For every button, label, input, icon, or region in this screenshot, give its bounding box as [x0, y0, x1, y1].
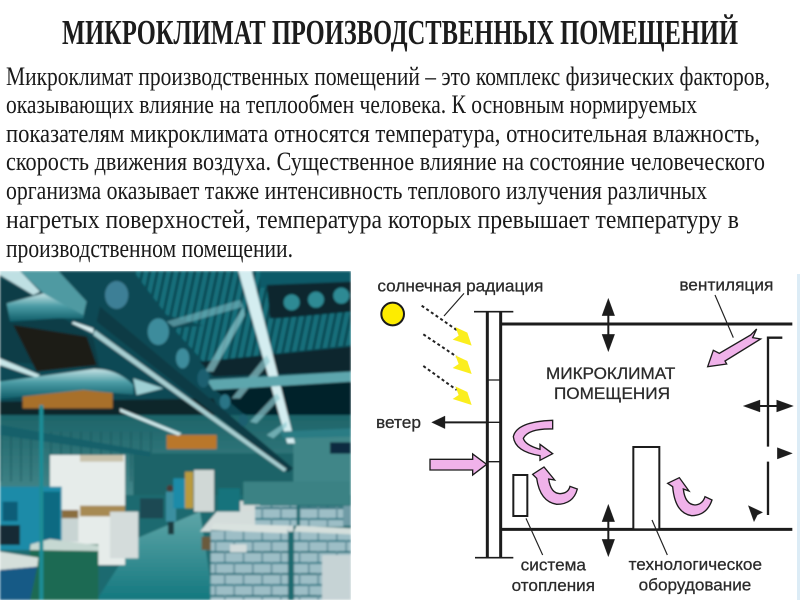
diagram labels — [376, 276, 773, 595]
photo floor — [0, 495, 351, 600]
text block: intro paragraph: нагретых поверхностей, температура которых превышает температуру в — [6, 204, 739, 234]
diagram labels: отопления — [512, 576, 595, 595]
photo ducts — [0, 369, 133, 399]
diagram labels: солнечная радиация — [377, 276, 543, 295]
photo rail with fans — [97, 307, 293, 472]
diagram labels: вентиляция — [679, 276, 773, 295]
right edge strip — [797, 274, 800, 600]
photo wall — [0, 413, 351, 496]
icon: sun — [381, 303, 404, 325]
photo ceiling structure — [0, 271, 351, 416]
photo: factory hall with ventilation — [0, 271, 351, 600]
photo light beams — [238, 271, 295, 443]
pink air flow arrows — [430, 329, 761, 516]
text block: intro paragraph — [6, 61, 770, 263]
leader lines — [444, 293, 733, 555]
diagram labels: система — [521, 556, 587, 575]
walls, floor and ceiling — [474, 312, 792, 558]
black exchange arrows — [432, 298, 793, 557]
diagram: room microclimate — [376, 276, 793, 595]
diagram labels: ветер — [376, 413, 421, 432]
solar radiation rays — [422, 306, 472, 405]
photo left stacks — [50, 455, 125, 565]
heating unit and equipment — [513, 447, 659, 529]
diagram labels: оборудование — [639, 576, 751, 595]
diagram labels: МИКРОКЛИМАТ — [546, 364, 675, 383]
photo right pallets — [200, 508, 293, 532]
photo worker — [166, 492, 176, 522]
photo orange panels — [23, 390, 113, 408]
diagram labels: ПОМЕЩЕНИЯ — [554, 384, 670, 403]
diagram labels: технологическое — [629, 555, 762, 574]
text block: intro paragraph: производственном помещении. — [6, 233, 293, 263]
